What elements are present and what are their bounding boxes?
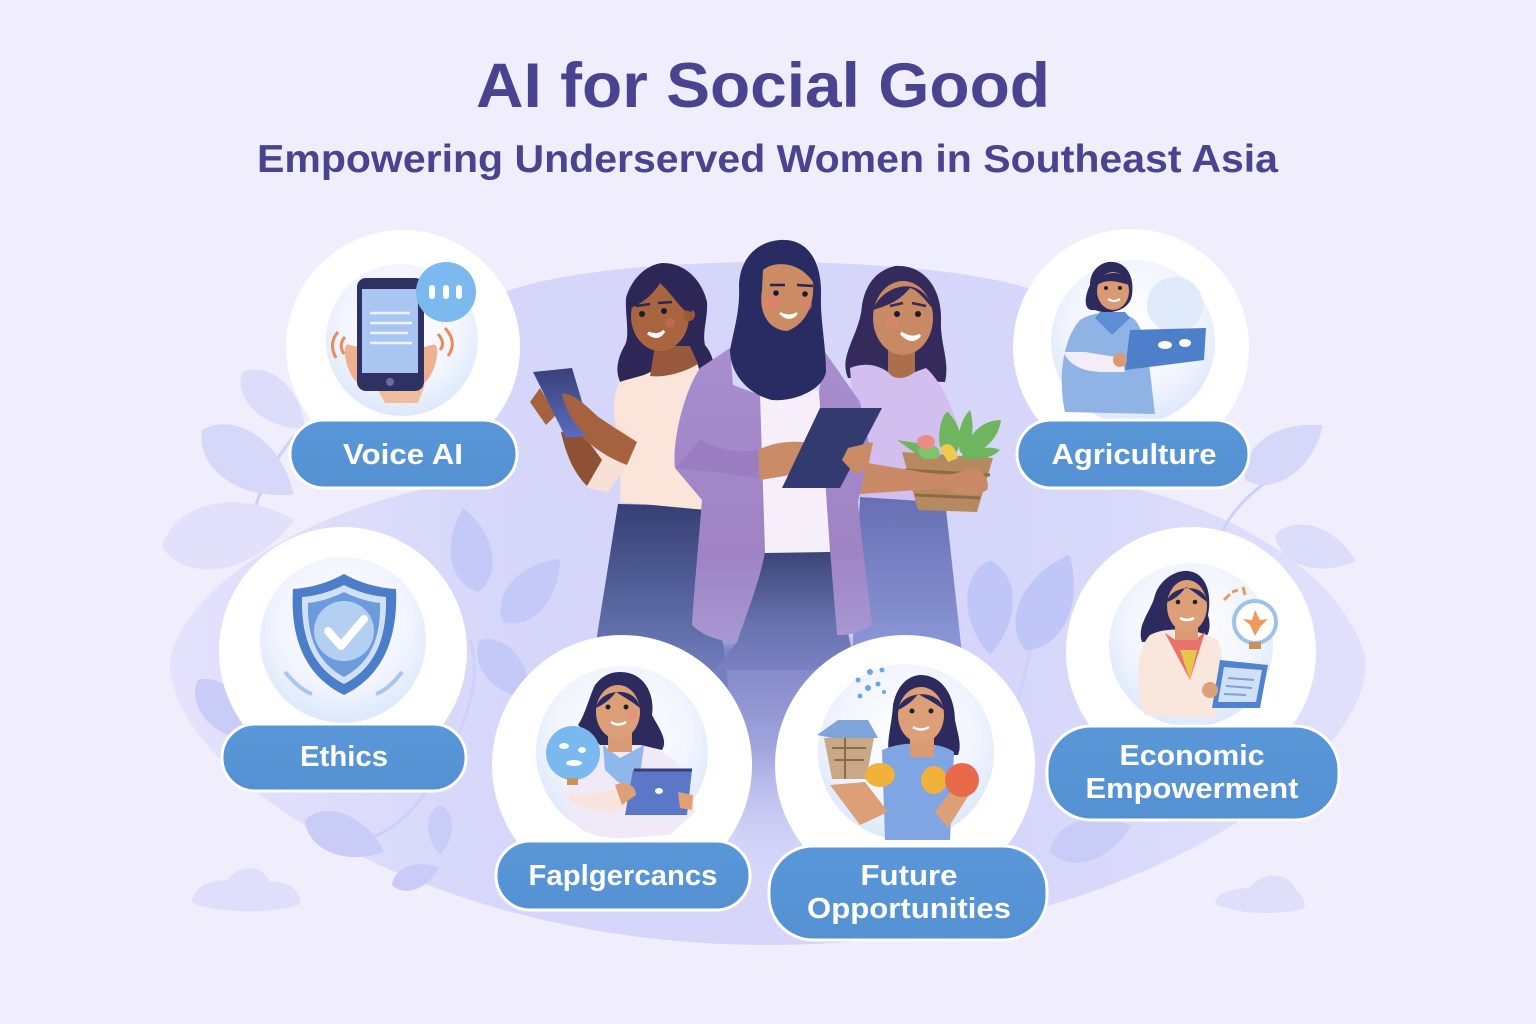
- panel: Future Opportunities: [769, 635, 1047, 940]
- subtitle: Empowering Underserved Women in Southeast Asia: [257, 138, 1278, 181]
- panel: Agriculture: [1013, 229, 1249, 488]
- panel: Economic Empowerment: [1047, 527, 1339, 820]
- panel: Voice AI: [286, 230, 520, 488]
- woman center in hijab with tablet: [674, 240, 882, 670]
- icon: shield with check: [285, 574, 402, 695]
- icon: phone with voice bubble: [332, 262, 476, 403]
- label pill: Agriculture: Agriculture: [1052, 439, 1216, 471]
- title: AI for Social Good: [476, 51, 1050, 121]
- icon: woman with tablet and bubble: [546, 672, 695, 838]
- label pill: Ethics: Ethics: [300, 741, 388, 773]
- label pill: Economic Empowerment: Economic: [1120, 740, 1264, 772]
- label pill: Economic Empowerment: [1047, 726, 1339, 820]
- woman right with basket: [845, 266, 1001, 700]
- label pill: Faplgercancs: Faplgercancs: [528, 860, 718, 892]
- icon: woman with clipboard and bulb: [1138, 571, 1276, 718]
- label pill: Future Opportunities: [769, 846, 1047, 940]
- label pill: Economic Empowerment: Empowerment: [1086, 773, 1299, 805]
- panel: Faplgercancs: [492, 635, 752, 910]
- background leaves: [155, 357, 1362, 913]
- woman left with tablet: [530, 263, 730, 700]
- icon: woman with basket and fruit: [817, 668, 979, 840]
- label pill: Future Opportunities: Opportunities: [807, 893, 1011, 925]
- label pill: Ethics: [222, 724, 466, 791]
- label pill: Voice AI: Voice AI: [343, 439, 463, 471]
- label pill: Faplgercancs: [496, 841, 750, 910]
- label pill: Agriculture: [1017, 420, 1249, 488]
- background blob: [170, 262, 1366, 945]
- fading column beneath figures: [700, 640, 850, 880]
- panel: Ethics: [219, 527, 467, 791]
- label pill: Future Opportunities: Future: [860, 860, 958, 892]
- label pill: Voice AI: [290, 420, 517, 488]
- central figures: three women: [530, 240, 1001, 880]
- icon: woman with tablet: [1062, 262, 1206, 414]
